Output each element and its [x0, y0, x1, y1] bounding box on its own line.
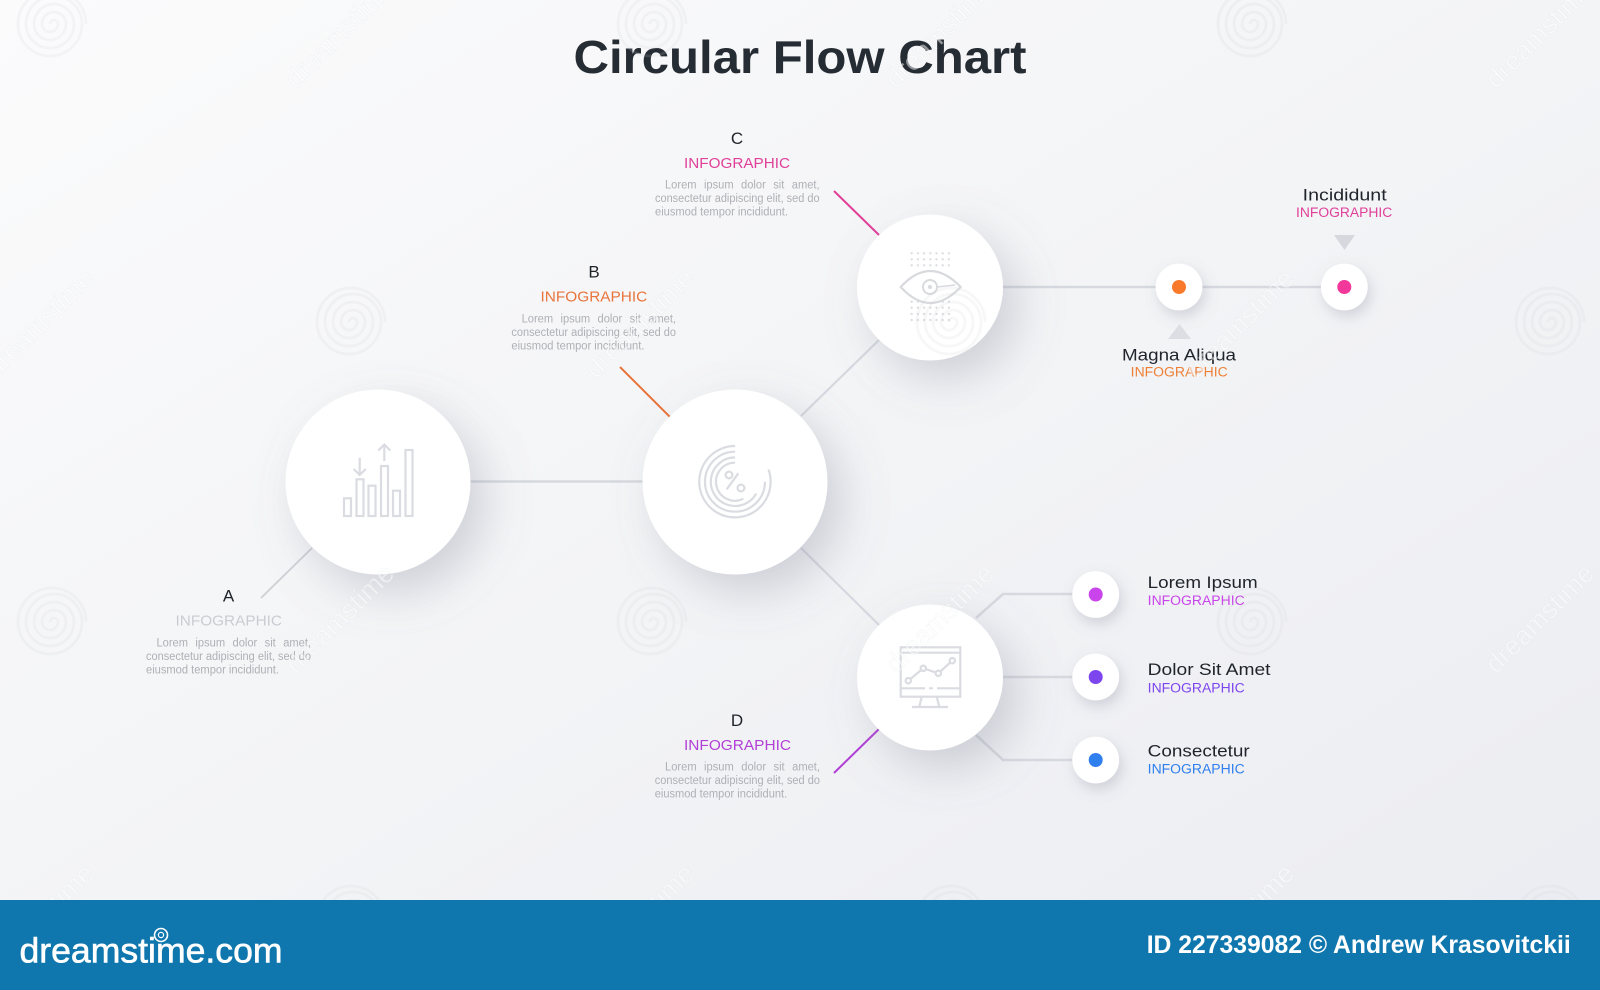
label: Magna Aliqua — [1122, 346, 1237, 380]
footer credit: ID 227339082 © Andrew Krasovitckii — [1147, 931, 1571, 959]
icon: eye with dot grid — [901, 253, 961, 320]
watermark overlay: dreamstime — [879, 558, 1000, 679]
small node: blue — [1072, 737, 1119, 783]
label: Consectetur: Consectetur — [1148, 743, 1250, 761]
label: Dolor Sit Amet — [1148, 661, 1271, 695]
title: Circular Flow Chart — [574, 31, 1026, 83]
footer bar — [0, 900, 1600, 990]
text block: C: consectetur adipiscing elit, sed do — [655, 193, 820, 205]
pointer line: C — [834, 191, 879, 235]
triangle marker down — [1334, 235, 1355, 250]
small node: pink — [1321, 264, 1368, 310]
watermark overlay: dreamstime — [1179, 858, 1300, 979]
label: Lorem Ipsum: Lorem Ipsum — [1148, 574, 1258, 592]
text block: C: Lorem ipsum dolor sit amet, — [665, 180, 820, 192]
circle node D — [857, 604, 1003, 750]
text block: D: INFOGRAPHIC — [684, 737, 791, 754]
watermark overlay: dreamstime — [579, 263, 700, 384]
watermark overlay: dreamstime — [1179, 263, 1300, 384]
text block: C: eiusmod tempor incididunt. — [655, 206, 788, 218]
text block: A: A — [223, 586, 235, 606]
triangle marker up — [1168, 324, 1191, 339]
pointer line: D — [834, 729, 879, 773]
icon: monitor with line chart — [901, 647, 960, 707]
label: Incididunt — [1296, 187, 1393, 220]
text block: B: consectetur adipiscing elit, sed do — [511, 327, 676, 339]
small node: magenta — [1072, 571, 1119, 618]
label: Magna Aliqua: INFOGRAPHIC — [1131, 365, 1228, 380]
label: Lorem Ipsum — [1148, 574, 1258, 608]
small node: violet — [1072, 654, 1119, 700]
label: Consectetur — [1148, 743, 1250, 776]
text block: C — [655, 129, 820, 218]
text block: A: Lorem ipsum dolor sit amet, — [156, 638, 311, 650]
label: Magna Aliqua: Magna Aliqua — [1122, 346, 1237, 364]
text block: A: INFOGRAPHIC — [176, 612, 282, 629]
text block: C: INFOGRAPHIC — [684, 155, 790, 172]
icon: percent radar — [699, 446, 771, 517]
watermark overlay: dreamstime — [1479, 558, 1600, 679]
text block: D: D — [731, 711, 743, 730]
footer logo: dreamstime.com — [20, 932, 282, 971]
pointer line: B — [620, 367, 670, 417]
text block: C: C — [731, 129, 743, 148]
circle node A — [286, 390, 470, 574]
circle node C — [857, 214, 1003, 360]
text block: B: INFOGRAPHIC — [540, 289, 647, 306]
text block: D: eiusmod tempor incididunt. — [655, 788, 787, 800]
label: Incididunt: Incididunt — [1303, 187, 1387, 205]
text block: B: eiusmod tempor incididunt. — [511, 340, 644, 352]
pointer line: A — [261, 548, 312, 598]
text block: A: eiusmod tempor incididunt. — [146, 664, 279, 676]
text block: A: consectetur adipiscing elit, sed do — [146, 651, 311, 663]
text block: B: Lorem ipsum dolor sit amet, — [522, 314, 676, 326]
text block: B: B — [588, 263, 600, 282]
text block: D: consectetur adipiscing elit, sed do — [655, 775, 820, 787]
text block: B — [511, 263, 676, 352]
circle node B — [642, 390, 828, 574]
label: Dolor Sit Amet: Dolor Sit Amet — [1148, 661, 1271, 679]
label: Incididunt: INFOGRAPHIC — [1296, 205, 1393, 220]
label: Lorem Ipsum: INFOGRAPHIC — [1148, 593, 1245, 608]
label: Consectetur: INFOGRAPHIC — [1148, 761, 1245, 776]
watermark overlay: dreamstime — [279, 558, 400, 679]
connector lines — [470, 287, 1344, 760]
label: Dolor Sit Amet: INFOGRAPHIC — [1148, 680, 1245, 695]
text block: D — [655, 711, 820, 800]
text block: D: Lorem ipsum dolor sit amet, — [665, 762, 820, 774]
text block: A — [146, 586, 311, 676]
watermark overlay: dreamstime — [579, 858, 700, 979]
icon: bar chart with arrows — [344, 444, 412, 516]
small node: orange — [1156, 264, 1202, 310]
